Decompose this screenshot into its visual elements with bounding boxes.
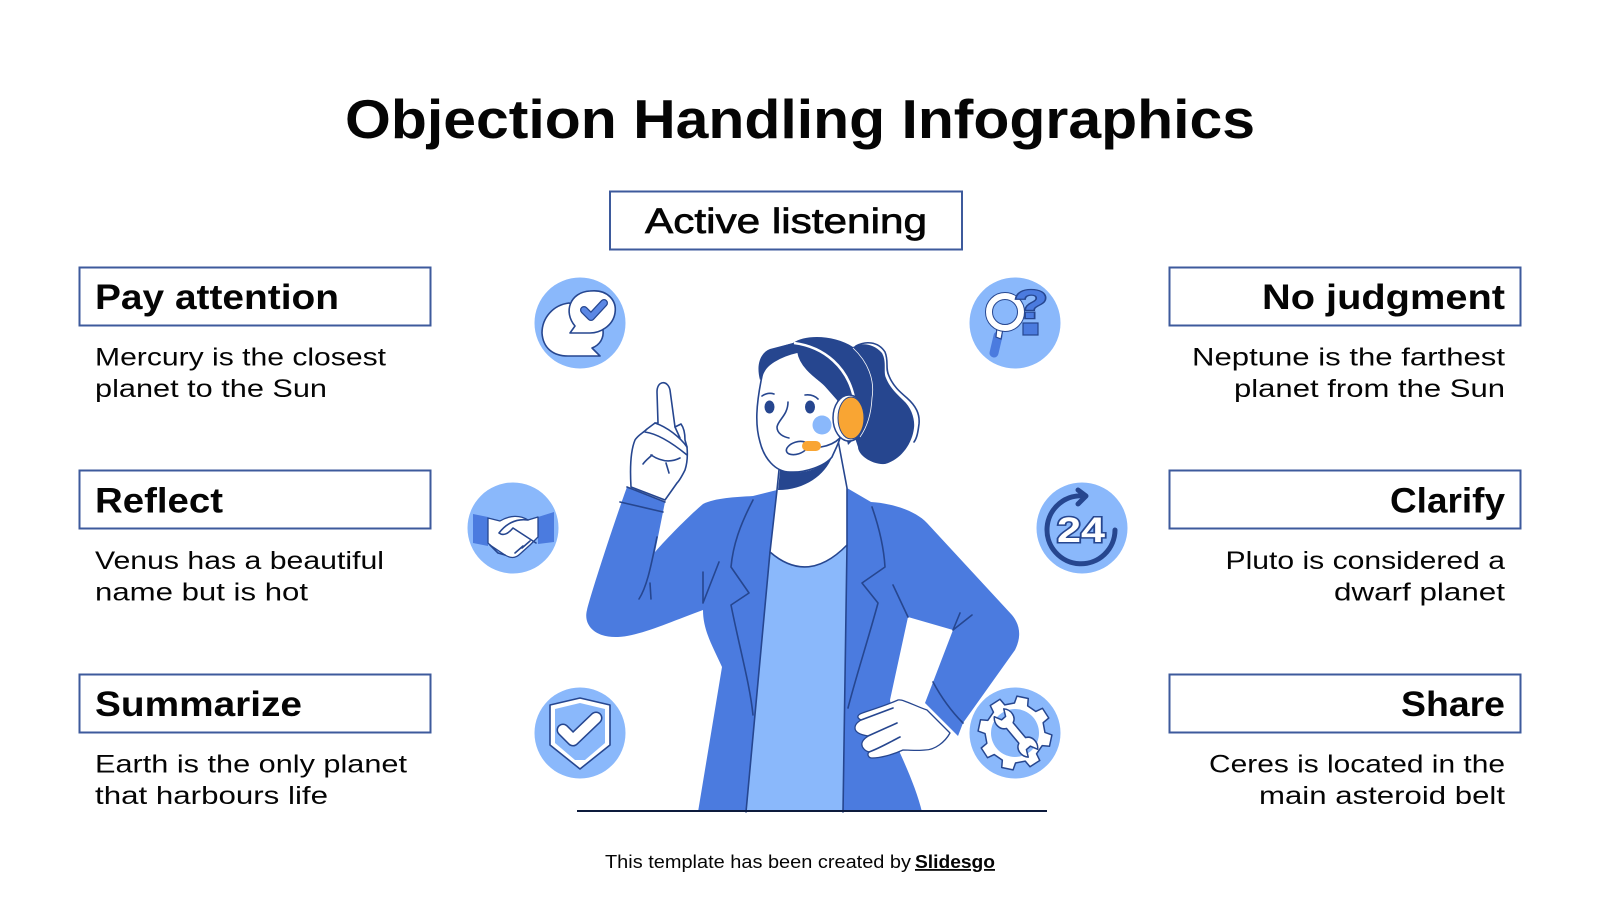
icon: shield with check [534,688,626,778]
mouth [785,439,809,457]
description [95,344,386,403]
raised hand [630,383,687,500]
jacket lines [639,500,972,812]
icon: magnifier and question mark [970,278,1060,368]
title: Objection Handling Infographics [345,88,1255,150]
icon: handshake [468,482,558,574]
ear cup [833,395,865,441]
label box: Clarify [1390,482,1506,520]
label box [80,268,430,326]
label box: No judgment [1262,278,1505,317]
neck [770,440,847,567]
label box: Share [1401,685,1505,724]
front hair [758,340,856,400]
description: name but is hot [95,578,308,606]
description: Pluto is considered a [1226,547,1505,575]
hip hand [855,700,950,758]
icon: gear with wrench [970,688,1060,778]
label box: Reflect [95,482,223,520]
ponytail outline [856,343,919,442]
microphone [802,441,821,451]
panel: Reflect [80,470,430,606]
headband [794,343,854,398]
icon: 24 hour arrow: 24 [1057,511,1106,550]
description [1209,750,1505,810]
hair highlight [853,348,873,437]
panel: Pay attention [80,268,430,403]
label box [1170,674,1520,732]
description: that harbours life [95,782,328,810]
description [95,547,384,606]
nose [777,402,789,438]
jacket [586,487,1019,812]
ground line [577,810,1047,812]
footer credit: Slidesgo [915,852,995,872]
description: main asteroid belt [1259,782,1505,810]
hair under chin [778,457,832,490]
panel: No judgment [1170,268,1520,403]
illustration: woman with headset [586,337,1019,812]
heading: Active listening [610,192,962,250]
description: Ceres is located in the [1209,750,1505,778]
label box [80,674,430,732]
description [1226,547,1505,606]
label box [1170,268,1520,326]
icon: magnifier and question mark: ? [1014,283,1048,327]
panel: Share [1170,674,1520,810]
face [757,352,840,472]
sleeve cuff line [620,487,665,512]
label box [80,470,430,528]
hip hand fingers [861,708,900,752]
description [95,750,407,810]
description: Mercury is the closest [95,344,386,372]
description: dwarf planet [1334,578,1505,606]
icon: speech bubbles with check [534,278,626,368]
description: planet from the Sun [1234,375,1505,403]
description: planet to the Sun [95,375,327,403]
description: Earth is the only planet [95,750,407,778]
ponytail and hair [760,337,914,464]
label box: Summarize [95,685,302,724]
icon: 24 hour arrow [1036,482,1128,574]
label box [1170,470,1520,528]
microphone wire [821,438,840,447]
label box: Pay attention [95,278,339,317]
eyes and brows [762,393,818,414]
cheek [812,416,832,434]
footer credit: This template has been created by [605,852,911,872]
description: Neptune is the farthest [1192,344,1505,372]
shirt [746,545,847,812]
heading: Active listening: Active listening [645,202,927,241]
panel: Clarify [1170,470,1520,606]
description [1192,344,1505,403]
description: Venus has a beautiful [95,547,384,575]
panel: Summarize [80,674,430,810]
